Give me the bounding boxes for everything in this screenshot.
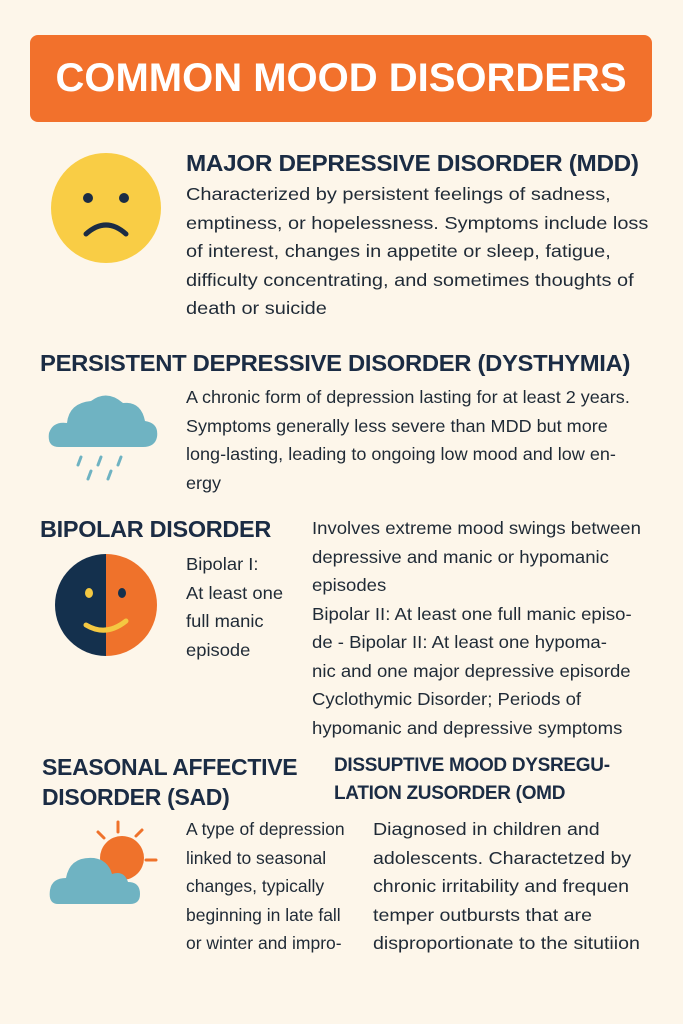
text: dysthymia <box>186 387 630 492</box>
text: DMDD: disproportionate to the situtiion <box>373 933 640 953</box>
heading: dysthymia: PERSISTENT DEPRESSIVE DISORDER (DYSTHYMIA) <box>40 350 630 376</box>
text: SAD: beginning in late fall <box>186 904 341 924</box>
title banner: COMMON MOOD DISORDERS <box>55 56 627 100</box>
text: MDD: emptiness, or hopelessness. Symptoms include loss <box>186 212 648 232</box>
text: SAD: changes, typically <box>186 876 324 896</box>
text: MDD: difficulty concentrating, and sometimes thoughts of <box>186 270 634 290</box>
text: MDD: Characterized by persistent feelings of sadness, <box>186 184 611 204</box>
text: bipolar I: At least one <box>186 582 283 602</box>
text: dysthymia: long-lasting, leading to ongoing low mood and low en- <box>186 444 616 464</box>
text: bipolar description: Cyclothymic Disorder; Periods of <box>312 689 581 709</box>
heading: SAD: DISORDER (SAD) <box>42 784 229 810</box>
text: bipolar description: de - Bipolar II: At least one hypoma- <box>312 632 607 652</box>
text: bipolar I: Bipolar I: <box>186 554 259 574</box>
text: bipolar description <box>312 518 641 738</box>
text: dysthymia: ergy <box>186 472 221 492</box>
icon: bipolar face <box>55 554 157 656</box>
heading: DMDD: LATION ZUSORDER (OMD <box>334 783 565 804</box>
text: bipolar I <box>186 554 283 660</box>
text: bipolar description: Involves extreme mood swings between <box>312 518 641 538</box>
text: DMDD: chronic irritability and frequen <box>373 876 629 896</box>
text: bipolar I: full manic <box>186 611 264 631</box>
text: bipolar description: depressive and manic or hypomanic <box>312 546 609 566</box>
heading: DMDD: DISSUPTIVE MOOD DYSREGU- <box>334 755 610 776</box>
text: SAD: linked to seasonal <box>186 848 326 868</box>
text: SAD: or winter and impro- <box>186 933 342 953</box>
text: DMDD: adolescents. Charactetzed by <box>373 848 631 868</box>
heading: MDD: MAJOR DEPRESSIVE DISORDER (MDD) <box>186 150 639 176</box>
text: SAD <box>186 819 345 953</box>
text: bipolar I: episode <box>186 640 250 660</box>
text: bipolar description: nic and one major depressive episorde <box>312 660 631 680</box>
text: DMDD <box>373 819 640 953</box>
text: bipolar description: Bipolar II: At least one full manic episo- <box>312 604 632 624</box>
text: dysthymia: Symptoms generally less severe than MDD but more <box>186 416 608 436</box>
icon: sun and cloud <box>50 820 158 904</box>
text: bipolar description: hypomanic and depressive symptoms <box>312 718 622 738</box>
heading: DMDD <box>334 755 610 804</box>
text: MDD: death or suicide <box>186 298 327 318</box>
text: dysthymia: A chronic form of depression lasting for at least 2 years. <box>186 387 630 407</box>
text: DMDD: Diagnosed in children and <box>373 819 600 839</box>
text: SAD: A type of depression <box>186 819 345 839</box>
text: MDD: of interest, changes in appetite or sleep, fatigue, <box>186 241 611 261</box>
text: bipolar description: episodes <box>312 575 386 595</box>
heading: SAD: SEASONAL AFFECTIVE <box>42 754 297 780</box>
text: DMDD: temper outbursts that are <box>373 904 592 924</box>
heading: SAD <box>42 754 297 810</box>
icon: rain cloud <box>48 396 158 480</box>
title banner <box>30 35 652 122</box>
text: MDD <box>186 184 648 318</box>
icon: sad face <box>51 153 161 263</box>
heading: bipolar: BIPOLAR DISORDER <box>40 516 271 542</box>
